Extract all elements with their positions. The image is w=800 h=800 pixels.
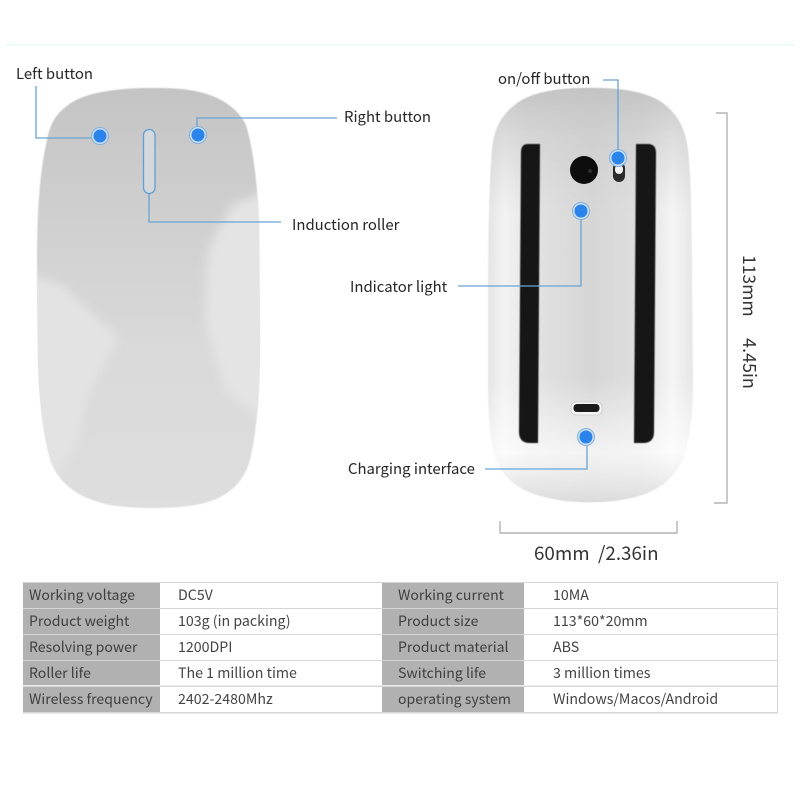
height dimension label: 113mm <box>737 255 762 317</box>
leader: Induction roller <box>149 194 281 222</box>
row: frequency and operating system <box>29 689 718 709</box>
specification table <box>23 582 778 714</box>
row: roller and switching life: Roller life <box>29 663 91 683</box>
row: weight and size: Product size <box>398 611 479 631</box>
left mouse: top view <box>28 88 270 508</box>
row: roller and switching life <box>29 663 651 683</box>
width dimension bracket <box>500 521 677 533</box>
row: frequency and operating system: operating system <box>398 689 511 709</box>
row: weight and size <box>29 611 648 631</box>
leader: Indicator light <box>458 218 581 286</box>
height dimension label <box>737 255 763 389</box>
height dimension label: 4.45in <box>737 338 763 389</box>
leader: Charging interface <box>485 444 587 469</box>
marker: on/off button <box>610 150 626 166</box>
marker: Indicator light <box>572 202 590 220</box>
label: Right button: Right button <box>344 106 431 127</box>
label: on/off button: on/off button <box>498 68 590 89</box>
height dimension bracket <box>714 113 727 503</box>
row: voltage and current: Working voltage <box>29 585 135 605</box>
sensor hole <box>570 156 598 184</box>
leader: Right button <box>197 118 337 128</box>
marker: Left button <box>92 128 108 144</box>
row: voltage and current <box>29 585 589 605</box>
marker: Right button <box>190 126 206 144</box>
table label column 2 <box>382 583 524 712</box>
row: resolving power and material: Product material <box>398 637 509 657</box>
marker: Charging interface <box>578 428 594 446</box>
left black slot <box>519 144 540 443</box>
table grid lines <box>23 582 778 714</box>
row: resolving power and material <box>29 637 579 657</box>
top divider line <box>6 44 795 46</box>
row: frequency and operating system: 2402-2480Mhz <box>178 689 273 709</box>
label: Induction roller: Induction roller <box>292 214 400 235</box>
label: Charging interface: Charging interface <box>348 458 475 479</box>
width dimension label: 60mm /2.36in <box>534 539 659 566</box>
row: frequency and operating system: Wireless frequency <box>29 689 153 709</box>
row: frequency and operating system: Windows/Macos/Android <box>553 689 718 709</box>
right black slot <box>634 144 656 443</box>
label: Indicator light: Indicator light <box>350 276 448 297</box>
table label column 1 <box>23 583 160 712</box>
row: weight and size: Product weight <box>29 611 130 631</box>
row: voltage and current: 10MA <box>553 585 589 605</box>
row: roller and switching life: 3 million times <box>553 663 651 683</box>
right mouse: bottom view <box>488 88 693 502</box>
row: roller and switching life: The 1 million time <box>178 663 297 683</box>
power switch <box>613 162 625 182</box>
row: voltage and current: Working current <box>398 585 505 605</box>
row: roller and switching life: Switching life <box>398 663 486 683</box>
row: resolving power and material: ABS <box>553 637 579 657</box>
induction roller outline <box>144 130 155 194</box>
label: Left button: Left button <box>16 63 93 84</box>
leader: Left button <box>36 86 93 138</box>
row: weight and size: 113*60*20mm <box>553 611 648 631</box>
row: voltage and current: DC5V <box>178 585 214 605</box>
row: weight and size: 103g (in packing) <box>178 611 291 631</box>
micro USB port <box>571 402 602 415</box>
row: resolving power and material: 1200DPI <box>178 637 232 657</box>
leader: on/off button <box>603 80 618 152</box>
row: resolving power and material: Resolving power <box>29 637 138 657</box>
